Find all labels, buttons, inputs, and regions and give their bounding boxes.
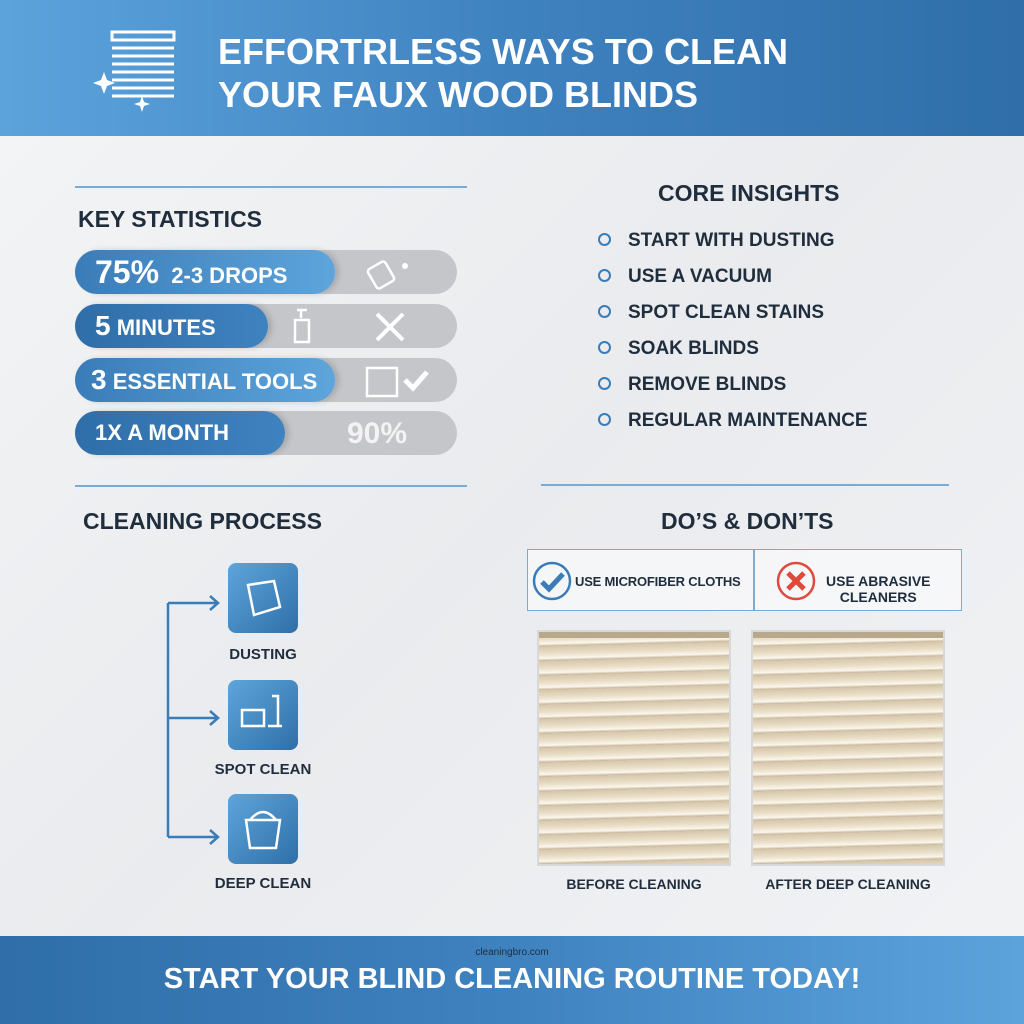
footer banner: cleaningbro.com (475, 947, 549, 958)
panel: statistics bars: 75% 2-3 DROPS (95, 254, 287, 290)
heading: dos and donts: DO’S & DON’TS (661, 508, 834, 534)
step: spot clean (228, 680, 298, 750)
heading: key statistics: KEY STATISTICS (78, 206, 262, 232)
step: deep clean (228, 794, 298, 864)
photo: before cleaning (537, 630, 731, 866)
photo: after cleaning (751, 630, 945, 866)
title: YOUR FAUX WOOD BLINDS (218, 74, 698, 115)
text: BEFORE CLEANING (566, 876, 702, 892)
list: core insights: SOAK BLINDS (628, 338, 759, 359)
panel: dos and donts: USE MICROFIBER CLOTHS (575, 574, 741, 589)
panel: dos and donts: USE ABRASIVE (826, 573, 931, 589)
list: core insights: REGULAR MAINTENANCE (628, 410, 868, 431)
text: SPOT CLEAN (215, 761, 311, 778)
panel: statistics bars: 1X A MONTH (95, 420, 229, 445)
header banner (0, 0, 1024, 136)
title: EFFORTRLESS WAYS TO CLEAN (218, 31, 788, 72)
text: DEEP CLEAN (215, 875, 311, 892)
flow arrows (166, 595, 220, 845)
list: core insights: USE A VACUUM (628, 266, 772, 287)
heading: core insights: CORE INSIGHTS (658, 180, 839, 206)
panel: statistics bars (75, 248, 457, 457)
list: core insights (598, 230, 868, 431)
list: core insights: REMOVE BLINDS (628, 374, 786, 395)
title (218, 31, 788, 115)
list: core insights: START WITH DUSTING (628, 230, 835, 251)
panel: dos and donts: CLEANERS (840, 589, 917, 605)
footer banner (0, 936, 1024, 1024)
text: AFTER DEEP CLEANING (765, 876, 931, 892)
list: core insights: SPOT CLEAN STAINS (628, 302, 824, 323)
icon: blinds (93, 30, 176, 112)
footer banner: START YOUR BLIND CLEANING ROUTINE TODAY! (164, 963, 860, 995)
panel: statistics bars: 5 MINUTES (95, 310, 216, 341)
panel: dos and donts (527, 549, 962, 611)
panel: statistics bars: 90% (347, 417, 407, 450)
text: DUSTING (229, 646, 297, 663)
step: dusting (228, 563, 298, 633)
panel: statistics bars: 3 ESSENTIAL TOOLS (91, 364, 317, 395)
heading: cleaning process: CLEANING PROCESS (83, 508, 322, 534)
